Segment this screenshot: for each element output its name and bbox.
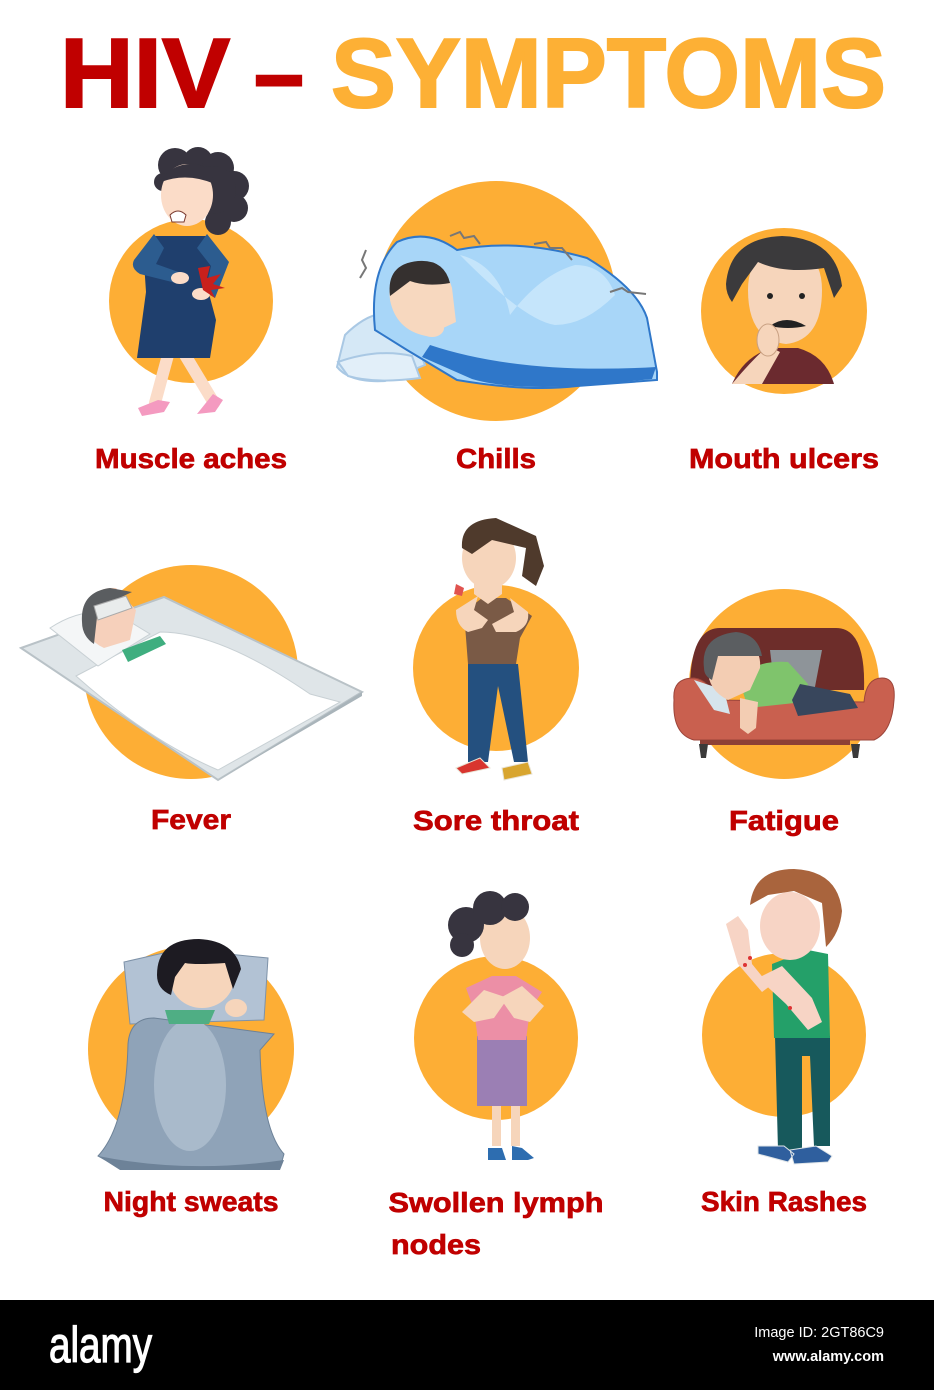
icon: woman holding her side [133, 147, 249, 416]
icon: orange circle [413, 585, 579, 751]
icon: woman holding neck [448, 891, 544, 1160]
label: sore throat: Sore throat [413, 805, 579, 836]
panel: skin rashes [701, 869, 867, 1217]
icon: man touching mouth [726, 236, 842, 384]
panel: mouth ulcers [689, 228, 879, 474]
label: mouth ulcers: Mouth ulcers [689, 443, 879, 474]
panel: sore throat [413, 518, 579, 836]
label: swollen lymph nodes: Swollen lymph [388, 1187, 604, 1218]
panel: fever [21, 565, 362, 835]
footer bar [0, 1300, 934, 1390]
title: SYMPTOMS [331, 18, 886, 128]
panel: muscle aches [95, 147, 287, 474]
title [60, 18, 886, 128]
curly hair [154, 147, 249, 235]
icon: orange circle [702, 953, 866, 1117]
panel: fatigue [674, 589, 894, 836]
label: night sweats: Night sweats [104, 1186, 278, 1217]
icon: orange circle [701, 228, 867, 394]
icon: orange circle [109, 219, 273, 383]
label: fever: Fever [151, 804, 231, 835]
icon: orange circle [84, 565, 298, 779]
title: HIV [60, 18, 230, 128]
icon: man with rash on arm [726, 869, 842, 1164]
icon: child under grey blanket [98, 939, 284, 1170]
icon: orange circle [88, 946, 294, 1152]
curly hair [448, 891, 529, 957]
icon: person under blanket [337, 232, 657, 388]
icon: orange circle [376, 181, 616, 421]
label: chills: Chills [456, 443, 536, 474]
icon: man holding throat [454, 518, 544, 780]
alamy logo: alamy [49, 1317, 152, 1373]
website: www.alamy.com [772, 1349, 884, 1365]
label: fatigue: Fatigue [729, 805, 839, 836]
label: muscle aches: Muscle aches [95, 443, 287, 474]
icon: man on sofa [674, 628, 894, 758]
icon: orange circle [689, 589, 879, 779]
image id: Image ID: 2GT86C9 [754, 1325, 884, 1341]
label: skin rashes: Skin Rashes [701, 1186, 867, 1217]
panel: night sweats [88, 939, 294, 1217]
title: – [254, 18, 304, 128]
panel: swollen lymph nodes [388, 891, 604, 1260]
panel: chills [337, 181, 657, 474]
label: swollen lymph nodes: nodes [391, 1229, 481, 1260]
icon: orange circle [414, 956, 578, 1120]
icon: person in bed [21, 588, 362, 780]
label: swollen lymph nodes [388, 1187, 604, 1260]
